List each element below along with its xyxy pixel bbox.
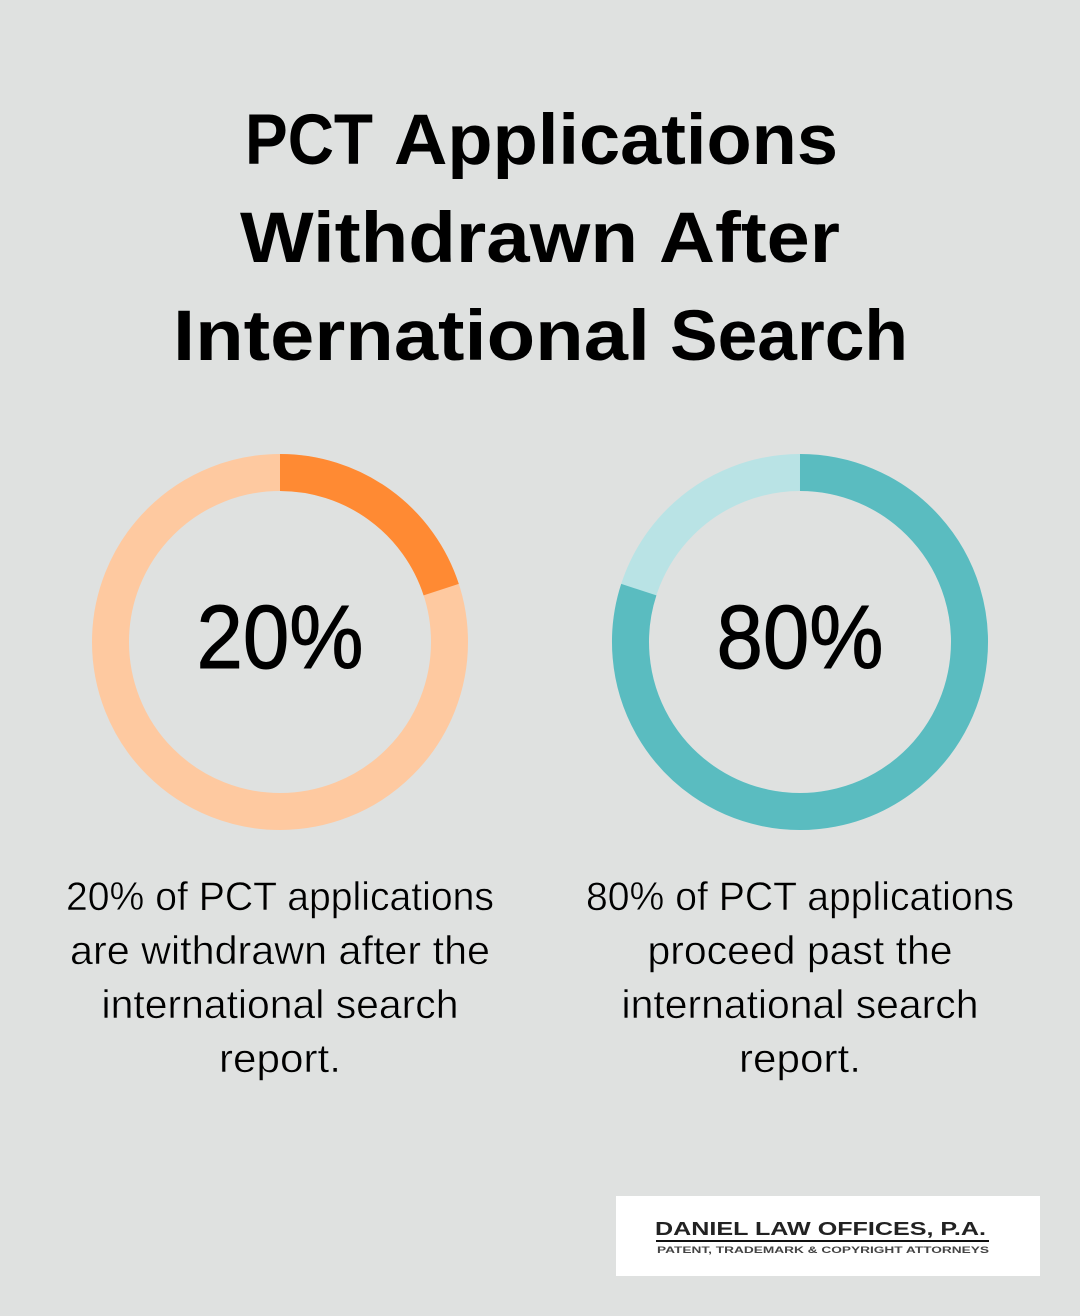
panel: 20% withdrawn [66, 472, 494, 1081]
description: 20%: international search [102, 983, 458, 1027]
description: 80%: proceed past the [648, 929, 952, 973]
donut chart: 20% [110, 472, 450, 812]
value: 80%: 80% [716, 588, 884, 688]
description: 20% [66, 875, 494, 1081]
title: PCT [245, 101, 373, 180]
title: Withdrawn [240, 199, 638, 278]
description: 20%: report. [219, 1037, 341, 1081]
logo: Daniel Law Offices: DANIEL LAW OFFICES, P.A. [655, 1219, 986, 1239]
title: After [659, 199, 840, 278]
donut chart: 80% [630, 472, 970, 812]
logo: Daniel Law Offices [616, 1196, 1040, 1276]
title: International [173, 297, 650, 376]
title [173, 101, 908, 376]
description: 80% [586, 875, 1014, 1081]
description: 80%: international search [622, 983, 978, 1027]
panel: 80% proceed [586, 472, 1014, 1081]
logo: Daniel Law Offices: PATENT, TRADEMARK & COPYRIGHT ATTORNEYS [657, 1245, 989, 1256]
value: 20%: 20% [196, 588, 364, 688]
description: 20%: 20% of PCT applications [66, 875, 494, 919]
description: 20%: are withdrawn after the [70, 929, 490, 973]
title: Search [670, 297, 908, 376]
title: Applications [394, 101, 838, 180]
description: 80%: 80% of PCT applications [586, 875, 1014, 919]
description: 80%: report. [739, 1037, 861, 1081]
